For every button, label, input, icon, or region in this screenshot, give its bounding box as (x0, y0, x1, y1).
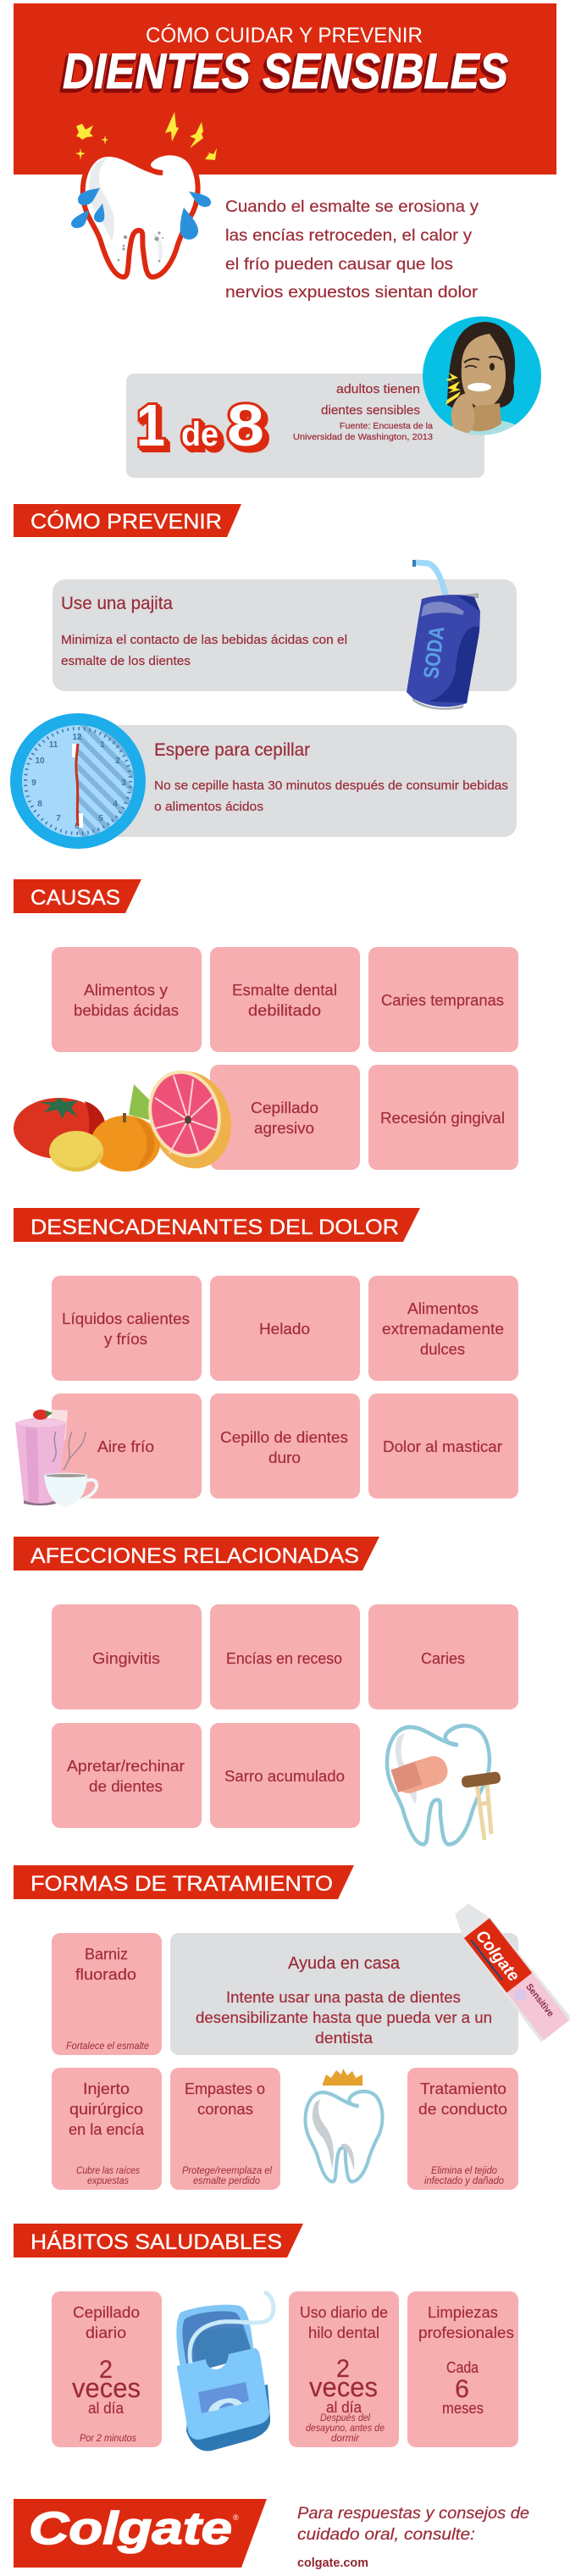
card: root canal: infectado y dañado (424, 2174, 504, 2186)
card: ice cream (210, 1276, 360, 1381)
icon: smoothie and hot cup (15, 1410, 97, 1507)
big number 1 de 8: de (181, 416, 219, 453)
footer logo: ® (233, 2513, 239, 2522)
card: daily flossing: dormir (331, 2432, 360, 2444)
card: professional cleanings: profesionales (418, 2324, 514, 2341)
icon: crying tooth (71, 112, 217, 277)
panel: home help: desensibilizante hasta que pueda ver a un (196, 2009, 492, 2026)
card: chewing pain (368, 1393, 518, 1499)
card: daily flossing: Después del (320, 2412, 370, 2424)
panel: treatments grid (52, 1933, 518, 2190)
card: daily brushing: diario (86, 2324, 126, 2341)
card: fillings or crowns: Protege/reemplaza el (182, 2164, 272, 2176)
section heading: Hábitos saludables: HÁBITOS SALUDABLES (30, 2230, 282, 2254)
card: gum graft: Cubre las raíces (76, 2164, 140, 2176)
icon: sparks (75, 112, 217, 160)
card: hard toothbrush: Cepillo de dientes (220, 1429, 348, 1446)
footer logo (14, 2499, 267, 2568)
panel: use a straw: esmalte de los dientes (61, 654, 191, 668)
icon: injured tooth with bandage and crutch (387, 1726, 501, 1844)
card: grinding: Apretar/rechinar (67, 1758, 185, 1775)
icon: soda can: SODA (419, 625, 450, 680)
card: sweet foods: dulces (420, 1341, 465, 1358)
card: hot and cold liquids (52, 1276, 202, 1381)
icon: toothpaste tube: Sensitive (523, 1982, 556, 2019)
section heading: Afecciones relacionadas: AFECCIONES RELACIONADAS (30, 1544, 359, 1568)
card: daily brushing: 2 (99, 2356, 113, 2384)
card: grinding: de dientes (89, 1778, 163, 1795)
panel: statistic (126, 374, 484, 478)
icon: clock (10, 713, 146, 849)
card: foods and drinks: Alimentos y (84, 982, 168, 999)
icon: clock: 5 (98, 814, 103, 823)
section heading: Desencadenantes del dolor (14, 1208, 420, 1242)
card: hot and cold liquids: Líquidos calientes (62, 1310, 190, 1327)
icon: clock: 8 (37, 800, 42, 809)
big number 1 de 8 (136, 392, 264, 458)
icon: clock: 1 (100, 740, 105, 750)
icon: clock: 7 (56, 814, 61, 823)
card: daily flossing: desayuno, antes de (306, 2422, 385, 2434)
card: gum graft: expuestas (87, 2174, 129, 2186)
footer text (297, 2505, 529, 2570)
panel: home help: Ayuda en casa (288, 1954, 401, 1973)
card: aggressive brushing: agresivo (254, 1120, 314, 1137)
card: root canal: Tratamiento (420, 2080, 506, 2097)
card: aggressive brushing (210, 1065, 360, 1170)
icon: clock: 6 (75, 822, 80, 831)
panel: wait to brush (53, 725, 517, 837)
panel: use a straw (53, 579, 517, 691)
icon: clock: 3 (121, 778, 126, 788)
card: daily flossing: hilo dental (308, 2324, 379, 2341)
panel: use a straw: Minimiza el contacto de las bebidas ácidas con el (61, 633, 347, 647)
card: weak enamel: Esmalte dental (232, 982, 337, 999)
icon: clock: 11 (49, 740, 58, 750)
card: grinding (52, 1723, 202, 1828)
card: fillings or crowns: esmalte perdido (193, 2174, 260, 2186)
card: ice cream: Helado (259, 1321, 310, 1338)
icon: clock: 10 (35, 756, 45, 766)
panel: related conditions grid (52, 1604, 518, 1828)
card: caries (368, 1604, 518, 1709)
card: professional cleanings: Limpiezas (428, 2304, 498, 2321)
icon: toothpaste tube: Colgate (472, 1927, 523, 1985)
panel: wait to brush: o alimentos ácidos (154, 800, 263, 814)
card: fillings or crowns: Empastes o (185, 2080, 265, 2097)
card: professional cleanings: 6 (455, 2375, 469, 2403)
intro paragraph (225, 198, 479, 302)
card: sweet foods (368, 1276, 518, 1381)
card: gum recession: Recesión gingival (380, 1110, 505, 1127)
card: fillings or crowns: coronas (197, 2101, 253, 2118)
card: professional cleanings: meses (442, 2400, 484, 2417)
icon: dental floss (176, 2292, 274, 2451)
card: hard toothbrush (210, 1393, 360, 1499)
panel: home help: Intente usar una pasta de dientes (226, 1989, 461, 2006)
statistic text: Fuente: Encuesta de la (340, 421, 433, 431)
card: root canal: Elimina el tejido (431, 2164, 497, 2176)
icon: soda can (407, 560, 480, 710)
card: gingivitis (52, 1604, 202, 1709)
card: fluoride varnish (52, 1933, 162, 2055)
card: daily flossing: 2 (336, 2355, 350, 2383)
card: gum graft: quirúrgico (69, 2101, 143, 2118)
section heading: Causas: CAUSAS (30, 886, 120, 910)
card: daily flossing: veces (309, 2372, 378, 2402)
icon: clock: 2 (115, 756, 120, 766)
card: professional cleanings (407, 2291, 518, 2447)
icon: woman with tooth pain (423, 317, 542, 445)
card: daily brushing: Cepillado (73, 2304, 140, 2321)
card: daily flossing: al día (326, 2399, 362, 2416)
title: DIENTES SENSIBLES (63, 44, 508, 99)
card: foods and drinks: bebidas ácidas (74, 1002, 179, 1019)
big number 1 de 8: 8 (227, 392, 264, 458)
footer text: cuidado oral, consulte: (297, 2526, 475, 2544)
intro paragraph: Cuando el esmalte se erosiona y (225, 198, 479, 216)
card: daily brushing: al día (88, 2400, 125, 2417)
big number 1 de 8: 1 (136, 392, 165, 458)
card: hard toothbrush: duro (268, 1449, 301, 1466)
icon: tears (71, 188, 211, 240)
card: root canal (407, 2068, 518, 2190)
statistic text: adultos tienen (336, 382, 420, 396)
card: hot and cold liquids: y fríos (104, 1331, 147, 1348)
statistic text (293, 382, 433, 442)
card: daily brushing (52, 2291, 162, 2447)
card: weak enamel: debilitado (248, 1002, 321, 1019)
panel: wait to brush: Espere para cepillar (154, 740, 310, 760)
footer text: colgate.com (297, 2556, 368, 2570)
section heading: Desencadenantes del dolor: DESENCADENANTES DEL DOLOR (30, 1216, 399, 1239)
card: daily flossing: Uso diario de (300, 2304, 388, 2321)
panel: wait to brush: No se cepille hasta 30 minutos después de consumir bebidas (154, 778, 508, 793)
section heading: Formas de tratamiento: FORMAS DE TRATAMIENTO (30, 1872, 333, 1896)
panel: use a straw: Use una pajita (61, 594, 173, 613)
card: gum graft (52, 2068, 162, 2190)
card: tartar (210, 1723, 360, 1828)
footer text: Para respuestas y consejos de (297, 2505, 529, 2523)
panel: healthy habits (52, 2291, 518, 2447)
statistic text: Universidad de Washington, 2013 (293, 432, 433, 442)
panel: home help: dentista (315, 2030, 374, 2047)
card: cold air: Aire frío (97, 1438, 154, 1455)
card: weak enamel (210, 947, 360, 1052)
card: gum recession (368, 1065, 518, 1170)
subtitle: CÓMO CUIDAR Y PREVENIR (146, 23, 423, 47)
card: cold air (52, 1393, 202, 1499)
icon: clock: 4 (113, 800, 118, 809)
card: fluoride varnish: fluorado (75, 1966, 136, 1983)
card: root canal: de conducto (418, 2101, 507, 2118)
card: foods and drinks (52, 947, 202, 1052)
card: fluoride varnish: Barniz (85, 1946, 128, 1963)
card: receding gums: Encías en receso (226, 1650, 342, 1667)
card: professional cleanings: Cada (446, 2359, 479, 2376)
card: sweet foods: extremadamente (382, 1321, 504, 1338)
section heading: Cómo prevenir (14, 504, 241, 537)
icon: tooth with crown (306, 2069, 382, 2181)
icon: clock: 12 (72, 733, 82, 742)
icon: fruits (14, 1061, 242, 1178)
card: receding gums (210, 1604, 360, 1709)
card: early caries: Caries tempranas (381, 992, 504, 1009)
panel: causes grid (52, 947, 518, 1170)
icon: toothpaste tube (446, 1897, 570, 2042)
intro paragraph: el frío pueden causar que los (225, 256, 453, 274)
section heading: Hábitos saludables (14, 2224, 303, 2257)
card: gum graft: Injerto (83, 2080, 130, 2097)
intro paragraph: nervios expuestos sientan dolor (225, 284, 479, 302)
card: early caries (368, 947, 518, 1052)
card: chewing pain: Dolor al masticar (383, 1438, 502, 1455)
card: daily flossing (289, 2291, 399, 2447)
section heading: Causas (14, 879, 141, 913)
card: daily brushing: veces (72, 2373, 141, 2403)
card: aggressive brushing: Cepillado (251, 1100, 318, 1116)
card: fillings or crowns (170, 2068, 280, 2190)
header banner (14, 3, 556, 175)
section heading: Afecciones relacionadas (14, 1537, 379, 1571)
footer logo: Colgate (29, 2503, 232, 2554)
panel: home help (170, 1933, 518, 2055)
icon: clock: 9 (31, 778, 36, 788)
card: gum graft: en la encía (69, 2121, 145, 2138)
card: gingivitis: Gingivitis (92, 1650, 160, 1667)
card: caries: Caries (421, 1650, 465, 1667)
card: tartar: Sarro acumulado (224, 1768, 345, 1785)
card: daily brushing: Por 2 minutos (80, 2432, 136, 2444)
intro paragraph: las encías retroceden, el calor y (225, 227, 473, 245)
section heading: Cómo prevenir: CÓMO PREVENIR (30, 509, 222, 534)
section heading: Formas de tratamiento (14, 1865, 354, 1899)
card: sweet foods: Alimentos (407, 1300, 479, 1317)
card: fluoride varnish: Fortalece el esmalte (66, 2040, 149, 2052)
statistic text: dientes sensibles (321, 403, 420, 418)
panel: triggers grid (52, 1276, 518, 1499)
